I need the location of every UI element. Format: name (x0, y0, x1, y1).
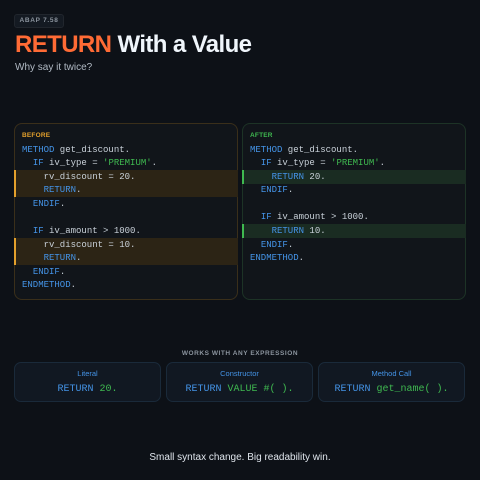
highlight: first redundant assignment (14, 170, 238, 197)
card code: RETURN VALUE #( ). (185, 384, 294, 395)
card title: Literal (77, 369, 98, 378)
subtitle: Why say it twice? (15, 62, 92, 73)
panel: after (242, 123, 466, 300)
card code: RETURN get_name( ). (334, 384, 449, 395)
badge: ABAP 7.58 (14, 14, 64, 28)
highlight: second redundant assignment (14, 238, 238, 265)
section heading: WORKS WITH ANY EXPRESSION (182, 350, 298, 357)
title: RETURN With a Value (15, 31, 251, 58)
card: method call (318, 362, 465, 402)
footer tagline: Small syntax change. Big readability win. (149, 452, 331, 463)
code: before: METHOD get_discount. IF iv_type = 'PREMIUM'. rv_discount = 20. RETURN. ENDIF. IF iv_amount > 1000. rv_discount = 10. RETURN. ENDIF. ENDMETHOD. (22, 144, 157, 290)
badge: ABAP 7.58: ABAP 7.58 (19, 17, 59, 24)
card code: RETURN 20. (57, 384, 118, 395)
panel: before (14, 123, 238, 300)
card: literal (14, 362, 161, 402)
label: before: BEFORE (22, 132, 50, 138)
card title: Method Call (371, 369, 412, 378)
label: after: AFTER (250, 132, 273, 138)
code: after: METHOD get_discount. IF iv_type = 'PREMIUM'. RETURN 20. ENDIF. IF iv_amount > 1000. RETURN 10. ENDIF. ENDMETHOD. (250, 144, 385, 263)
highlight: second direct return (242, 224, 466, 238)
card: constructor (166, 362, 313, 402)
card title: Constructor (220, 369, 259, 378)
highlight: first direct return (242, 170, 466, 184)
